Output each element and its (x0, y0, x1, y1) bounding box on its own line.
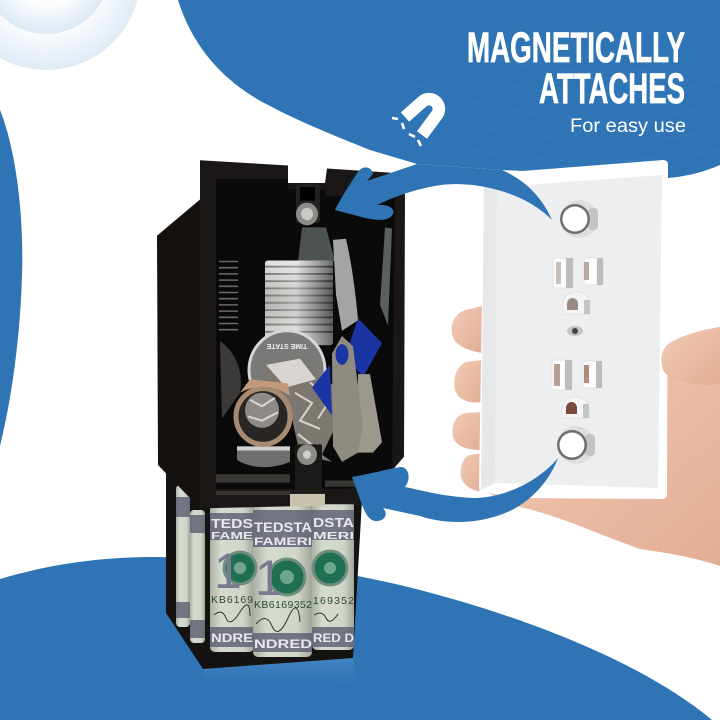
hand: thumb (661, 327, 720, 385)
bill rolls (176, 485, 354, 657)
arrow top (335, 164, 552, 220)
blue wave top right (178, 0, 720, 178)
beige strip (290, 494, 325, 506)
hand: back fingers and palm (452, 306, 720, 566)
serial numbers: 169352 (313, 595, 354, 607)
bill seal centres (234, 562, 336, 584)
outlet top (553, 258, 603, 314)
large coin: TIME STATE (266, 342, 307, 350)
bill lettering: NDRE (211, 631, 253, 645)
metal blade (333, 239, 358, 331)
device front frame (157, 160, 405, 508)
serial numbers: KB6169 (211, 594, 253, 606)
bill lettering: TEDS (211, 516, 253, 531)
reflection under device (200, 658, 358, 692)
arrow bottom (352, 458, 558, 522)
screw bottom (295, 444, 322, 492)
USB drive (312, 318, 382, 462)
icon: magnet (392, 99, 439, 146)
bill seals (224, 551, 347, 595)
panel: white outlet wall plate (479, 160, 668, 499)
bill lettering: MERI (313, 531, 354, 542)
bill lettering: DSTA (313, 515, 355, 530)
bill hundreds: 1 (255, 550, 283, 606)
magnet screw bottom (557, 426, 595, 464)
bill hundreds (214, 543, 283, 606)
serial numbers: KB6169352 (254, 599, 312, 611)
heading (467, 24, 685, 113)
serial numbers (211, 594, 354, 611)
subheading: For easy use (570, 116, 686, 137)
bill lettering: FAME (211, 531, 253, 542)
bill bands (176, 497, 354, 652)
blue shape bottom (0, 557, 712, 720)
bill lettering (211, 515, 355, 651)
center screw (567, 326, 583, 336)
coin stack (265, 260, 333, 345)
bill lettering: NDRED (254, 637, 312, 651)
foil and rings (236, 357, 345, 467)
signatures (214, 605, 338, 631)
left reflected coins (219, 262, 238, 330)
background circles top left (0, 0, 141, 70)
outlet bottom (552, 360, 602, 418)
bill hundreds: 1 (214, 543, 242, 599)
large coin (249, 331, 325, 409)
blue shape left (0, 110, 22, 446)
bill lettering: RED D (313, 631, 354, 645)
lower box with rolled bills (166, 470, 362, 669)
magnet screw top (560, 200, 598, 238)
screw top (296, 184, 320, 225)
bill lettering: TEDSTA (254, 519, 312, 535)
bill lettering: FAMERI (254, 536, 312, 548)
